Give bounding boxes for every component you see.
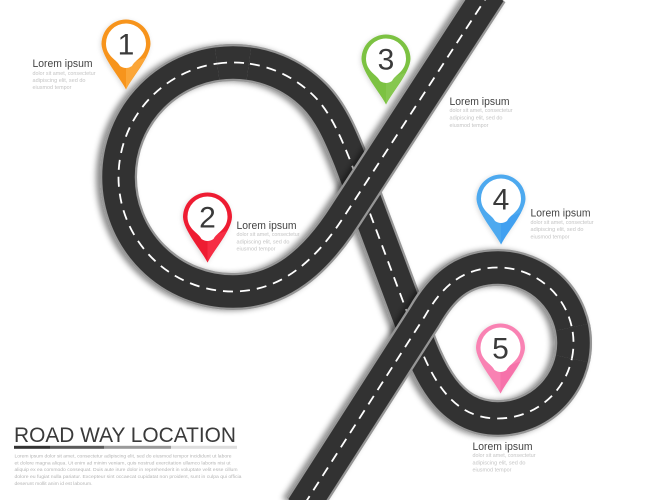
text block 1 — [32, 58, 96, 91]
pin 5: pink marker: 5 — [492, 332, 509, 366]
pin 3: green marker — [362, 34, 410, 104]
text block 3: eiusmod tempor — [450, 123, 489, 129]
road: connecting link running under both crossings — [233, 62, 574, 419]
text block 1: Lorem ipsum — [32, 58, 92, 70]
road: second loop and lower diagonal — [302, 268, 574, 500]
pin 2: red marker: 2 — [199, 202, 216, 234]
text block 2: eiusmod tempor — [236, 246, 276, 252]
road joint patch: top of first loop — [217, 62, 249, 64]
text block 4: eiusmod tempor — [530, 234, 570, 240]
pin 1: orange marker: 1 — [118, 28, 134, 62]
road: upper diagonal and first loop — [118, 0, 490, 292]
text block 5: adipiscing elit, sed do — [472, 460, 526, 466]
pin 1: orange marker — [102, 20, 150, 90]
title underline bar — [14, 446, 237, 449]
text block 2 — [236, 220, 300, 252]
text block 2: adipiscing elit, sed do — [236, 240, 290, 246]
text block 5: dolor sit amet, consectetur — [472, 453, 536, 459]
text block 3: adipiscing elit, sed do — [450, 116, 503, 122]
text block 2: Lorem ipsum — [236, 220, 296, 232]
text block 1: eiusmod tempor — [32, 85, 72, 91]
text block 1: adipiscing elit, sed do — [32, 78, 86, 84]
description paragraph: et dolore magna aliqua. Ut enim ad minim veniam, quis nostrud exercitation ullamco laboris nisi ut — [14, 460, 231, 466]
pin 3: green marker: 3 — [378, 44, 394, 76]
text block 1: dolor sit amet, consectetur — [32, 71, 96, 77]
text block 4: Lorem ipsum — [530, 208, 590, 220]
text block 4 — [530, 208, 594, 240]
text block 5 — [472, 441, 536, 474]
text block 5: eiusmod tempor — [472, 468, 512, 474]
pin 4: blue marker — [476, 174, 526, 244]
pin 4: blue marker: 4 — [493, 184, 509, 216]
description paragraph: deserunt mollit anim id est laborum. — [14, 481, 92, 487]
text block 4: dolor sit amet, consectetur — [530, 220, 594, 226]
text block 3 — [450, 96, 513, 129]
road joint patch: right of second loop — [572, 327, 574, 359]
text block 5: Lorem ipsum — [472, 441, 532, 453]
pin 2: red marker — [183, 192, 232, 262]
text block 2: dolor sit amet, consectetur — [236, 232, 300, 238]
pin 5: pink marker — [476, 324, 525, 394]
text block 4: adipiscing elit, sed do — [530, 227, 584, 233]
description paragraph: dolore eu fugiat nulla pariatur. Excepteur sint occaecat cupidatat non proident, sunt in culpa qui officia — [14, 474, 242, 480]
text block 3: dolor sit amet, consectetur — [450, 108, 513, 114]
description paragraph: Lorem ipsum dolor sit amet, consectetur adipiscing elit, sed do eiusmod tempor incididunt ut labore — [14, 454, 232, 460]
title: ROAD WAY LOCATION — [14, 424, 236, 447]
description paragraph: aliquip ex ea commodo consequat. Duis aute irure dolor in reprehenderit in voluptate velit esse cillum — [14, 467, 238, 473]
description paragraph — [14, 454, 242, 487]
text block 3: Lorem ipsum — [450, 96, 510, 108]
